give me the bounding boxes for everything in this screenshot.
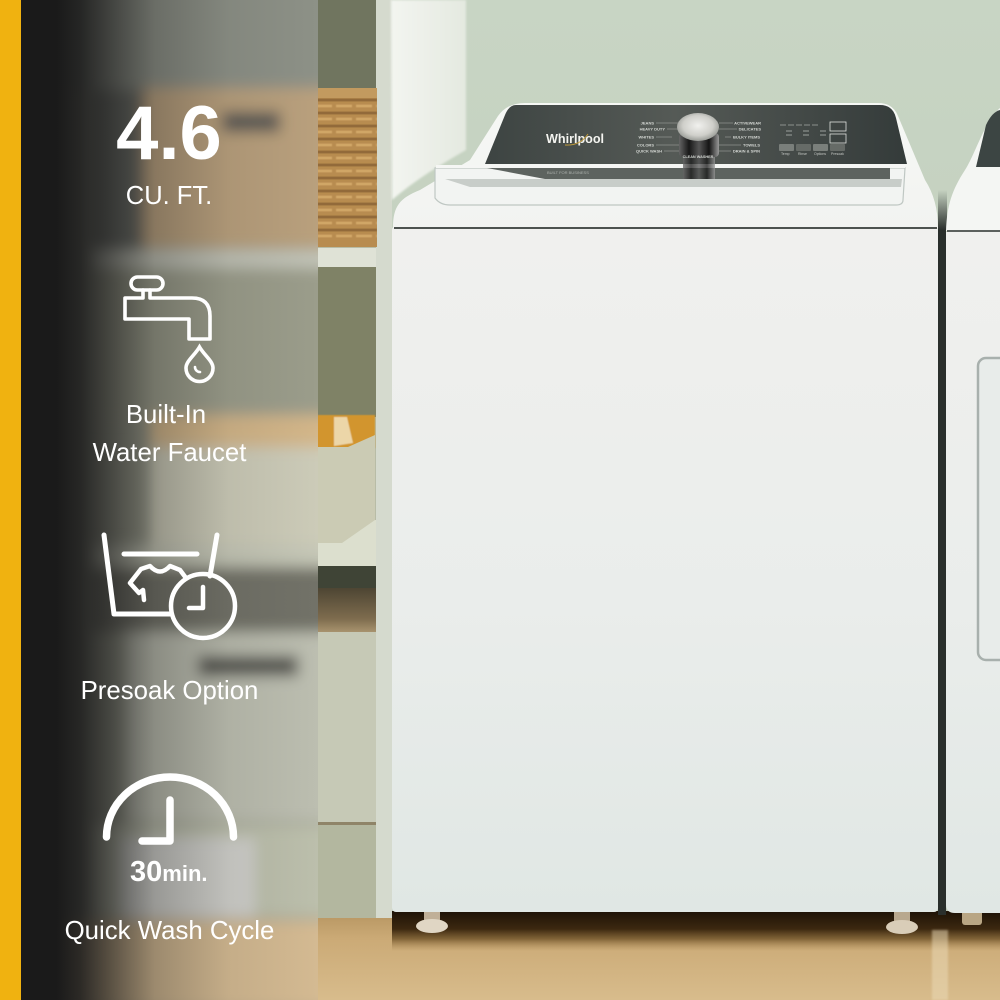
top zone	[140, 0, 318, 84]
blurred label	[198, 656, 298, 676]
shelving unit	[316, 0, 392, 918]
settings buttons: Options	[814, 152, 826, 156]
storage bin	[316, 435, 375, 543]
cycle labels left: COLORS	[637, 142, 654, 148]
cycle labels left: WHITES	[638, 134, 654, 140]
glass lid: BUILT FOR BUSINESS	[547, 170, 589, 175]
dial reflection	[683, 157, 715, 179]
settings buttons: Presoak	[831, 152, 844, 156]
cycle labels right: TOWELS	[743, 142, 760, 148]
curtain highlight	[391, 0, 466, 200]
feature: water faucet	[93, 277, 246, 467]
blurred plinth	[90, 825, 340, 917]
blurred bin	[150, 447, 340, 545]
brand logo: Whirlpool	[546, 132, 604, 146]
shadow under washer	[392, 911, 1000, 951]
settings buttons: Temp	[781, 152, 790, 156]
glass lid	[435, 165, 905, 205]
blurred lower shelf	[90, 545, 340, 567]
blurred basket label	[222, 112, 280, 132]
cycle labels right: ACTIVEWEAR	[734, 120, 761, 126]
second washer shell	[946, 108, 1000, 231]
second washer feet	[962, 910, 982, 925]
blurred dark gap two	[90, 567, 340, 632]
clean washer label: CLEAN WASHER	[683, 155, 714, 159]
blurred lower box	[125, 632, 340, 822]
feature: quick wash	[65, 777, 274, 945]
control console	[485, 105, 907, 164]
icon: basin with shirt and clock	[104, 535, 235, 638]
seam line	[394, 227, 937, 229]
main washer	[392, 103, 938, 934]
time label: 30min.	[130, 856, 208, 888]
cycle labels right: BULKY ITEMS	[733, 134, 760, 140]
label: quick wash: Quick Wash Cycle	[65, 917, 274, 945]
dark gradient panel	[21, 0, 318, 1000]
cycle labels right: DELICATES	[739, 126, 761, 132]
cycle labels left: HEAVY DUTY	[640, 126, 665, 132]
blurred floor	[86, 912, 318, 1000]
door handle	[978, 358, 1000, 660]
blurred dark gap	[90, 90, 142, 250]
blurred upper shelf	[90, 250, 340, 268]
label: faucet: Built-In	[126, 401, 206, 429]
background wall	[378, 0, 1000, 920]
label: faucet	[93, 401, 246, 467]
feature: presoak	[81, 535, 258, 705]
icon: water drop	[186, 347, 213, 382]
second washer console	[976, 110, 1000, 167]
blurred back wall	[90, 268, 340, 418]
dial knob	[677, 113, 719, 141]
right washer	[938, 108, 1000, 925]
icon: faucet	[125, 277, 210, 339]
translucent blurred panel backdrop	[73, 0, 318, 1000]
cycle labels right	[733, 120, 761, 154]
washer feet	[416, 910, 918, 934]
towel in bin	[316, 415, 375, 448]
blurred light box	[120, 838, 255, 918]
blurred basket	[142, 88, 342, 248]
cycle labels left: JEANS	[641, 120, 654, 126]
settings buttons: Rinse	[798, 152, 807, 156]
washer top shell	[393, 103, 938, 228]
cycle labels right: DRAIN & SPIN	[733, 148, 760, 154]
capacity unit: CU. FT.	[126, 182, 212, 210]
yellow accent bar	[0, 0, 21, 1000]
cycle labels left	[636, 120, 665, 154]
settings buttons	[779, 122, 846, 156]
dial lines	[656, 123, 741, 151]
washer cabinet	[392, 226, 938, 912]
icon: half clock	[106, 777, 234, 841]
wicker basket	[316, 88, 377, 247]
floor glare	[932, 930, 948, 1000]
label: presoak: Presoak Option	[81, 677, 258, 705]
blurred towel	[150, 415, 340, 447]
second washer cabinet	[946, 232, 1000, 913]
cycle labels left: QUICK WASH	[636, 148, 662, 154]
second washer seam	[947, 230, 1000, 232]
label: faucet: Water Faucet	[93, 439, 246, 467]
capacity stat	[116, 91, 222, 210]
dial stem	[679, 133, 719, 157]
floor	[316, 918, 1000, 1000]
capacity number: 4.6	[116, 91, 222, 176]
